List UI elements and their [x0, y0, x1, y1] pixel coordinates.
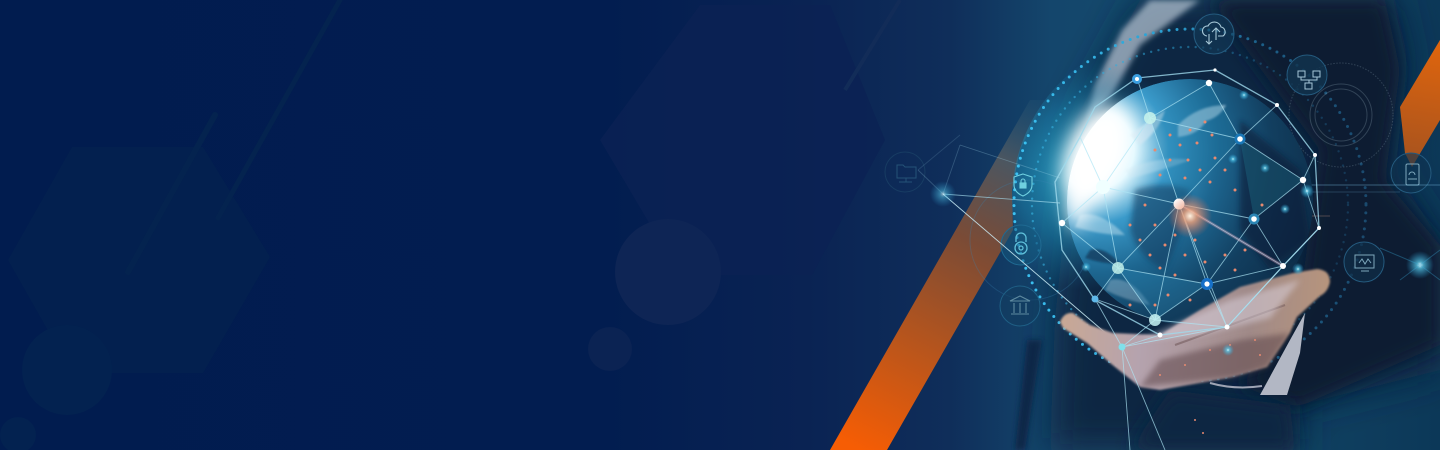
cloud streaks — [1075, 105, 1226, 305]
icon: shield — [1014, 174, 1032, 196]
dotted orbit rings — [1014, 29, 1366, 381]
network lines left — [918, 135, 1122, 347]
icon: network — [1287, 55, 1327, 95]
businessman suit — [1015, 0, 1440, 450]
cyan sparkles — [1081, 90, 1314, 356]
central orange flare — [1168, 194, 1212, 238]
halo behind globe — [1012, 32, 1348, 368]
orange data dots — [1128, 120, 1264, 434]
glare on globe — [1049, 96, 1143, 229]
thin target circles — [970, 63, 1393, 300]
shirt cuff — [1210, 313, 1305, 395]
earth — [1067, 79, 1313, 325]
right orange accent — [1400, 40, 1440, 167]
dark land — [1130, 185, 1190, 270]
glow: right star — [1380, 248, 1440, 280]
horizontal light streaks — [1130, 185, 1440, 216]
banner illustration — [588, 0, 1440, 450]
decorative hexagons and circles — [0, 0, 900, 450]
icon: cloud sync — [1194, 14, 1234, 54]
icon: monitor — [1344, 242, 1384, 282]
hand — [1060, 269, 1330, 390]
outer shell — [1055, 70, 1319, 335]
icon: faint folder — [885, 152, 925, 192]
teal panels — [1241, 142, 1300, 215]
geodesic network — [1055, 70, 1319, 450]
network nodes — [1059, 68, 1321, 351]
icon: bank — [1000, 286, 1040, 326]
shirt collar — [1085, 0, 1200, 125]
icon: mobile phone — [1391, 153, 1431, 193]
icon: padlock — [1001, 225, 1041, 265]
glow: left network node — [930, 181, 956, 207]
orange diagonal band — [830, 100, 1045, 450]
